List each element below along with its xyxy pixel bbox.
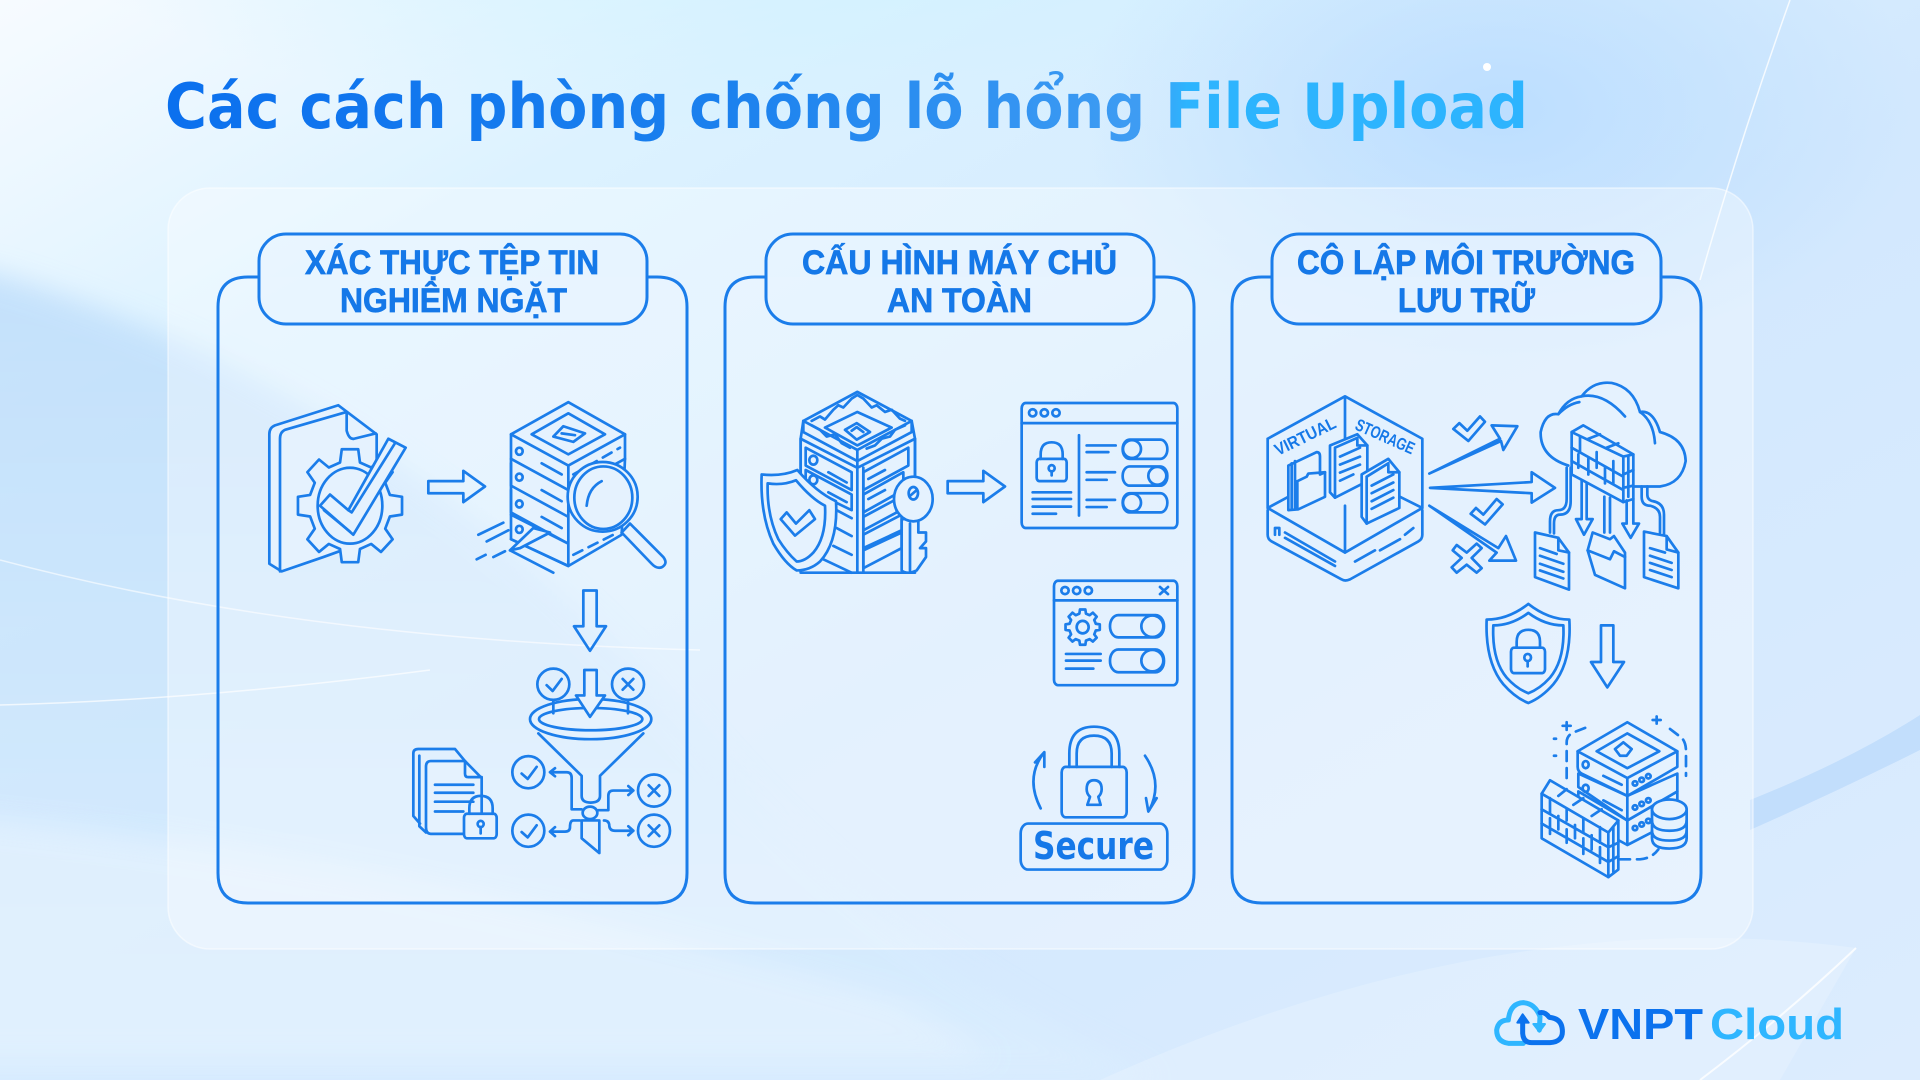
icon: filter funnel — [512, 669, 670, 853]
heading: AN TOÀN — [887, 282, 1032, 320]
panel frame — [218, 277, 687, 903]
heading — [802, 244, 1117, 320]
arrows: allow and deny routes — [1429, 416, 1555, 573]
icon: config window with gear and switches — [1054, 581, 1177, 685]
arrow — [1591, 625, 1624, 687]
heading tab — [1272, 234, 1661, 324]
panel: xác thực tệp tin nghiêm ngặt — [218, 234, 687, 903]
secure label: Secure — [1033, 824, 1154, 868]
label: STORAGE: STORAGE — [1352, 415, 1418, 458]
logo wordmark: VNPT — [1578, 1000, 1703, 1049]
heading — [305, 244, 599, 320]
icon: padlock with rotation arrows — [1021, 727, 1167, 870]
icons: validation flow — [269, 402, 670, 853]
panel frame — [1232, 277, 1701, 903]
logo mark — [1497, 1003, 1562, 1043]
icon: isolated files — [1535, 532, 1678, 590]
icon: settings window with lock and switches — [1022, 403, 1177, 528]
icon: document with gear and check — [269, 405, 406, 571]
heading: CÔ LẬP MÔI TRƯỜNG — [1297, 243, 1635, 282]
heading — [1297, 243, 1635, 320]
panel frame — [725, 277, 1194, 903]
heading: LƯU TRỮ — [1398, 282, 1536, 320]
icon: virtual storage box — [1268, 396, 1422, 580]
arrow — [948, 471, 1005, 502]
icon: server with magnifier — [477, 402, 665, 573]
heading tab — [766, 234, 1154, 324]
icon: shield with lock — [1487, 604, 1570, 703]
main card — [168, 188, 1753, 949]
logo: VNPT Cloud — [1497, 1000, 1844, 1049]
icons: isolated storage flow — [1268, 383, 1687, 877]
arrow — [428, 471, 485, 502]
icon: secure server with firewall and database — [1542, 716, 1687, 877]
heading: CẤU HÌNH MÁY CHỦ — [802, 244, 1117, 282]
icon: cloud firewall — [1541, 383, 1686, 538]
title: Các cách phòng chống lỗ hổng File Upload — [165, 70, 1528, 143]
heading: NGHIÊM NGẶT — [340, 282, 567, 320]
icons: server hardening flow — [761, 392, 1177, 870]
icon: locked documents — [413, 749, 497, 838]
panel: cô lập môi trường lưu trữ — [1232, 234, 1701, 903]
label: VIRTUAL: VIRTUAL — [1271, 414, 1339, 460]
heading tab — [259, 234, 647, 324]
icon: fortress server with shield and key — [761, 392, 933, 573]
heading: XÁC THỰC TỆP TIN — [305, 244, 599, 282]
arrow — [574, 591, 606, 651]
logo wordmark: cloud: Cloud — [1710, 1000, 1844, 1049]
panel: cấu hình máy chủ an toàn — [725, 234, 1194, 903]
